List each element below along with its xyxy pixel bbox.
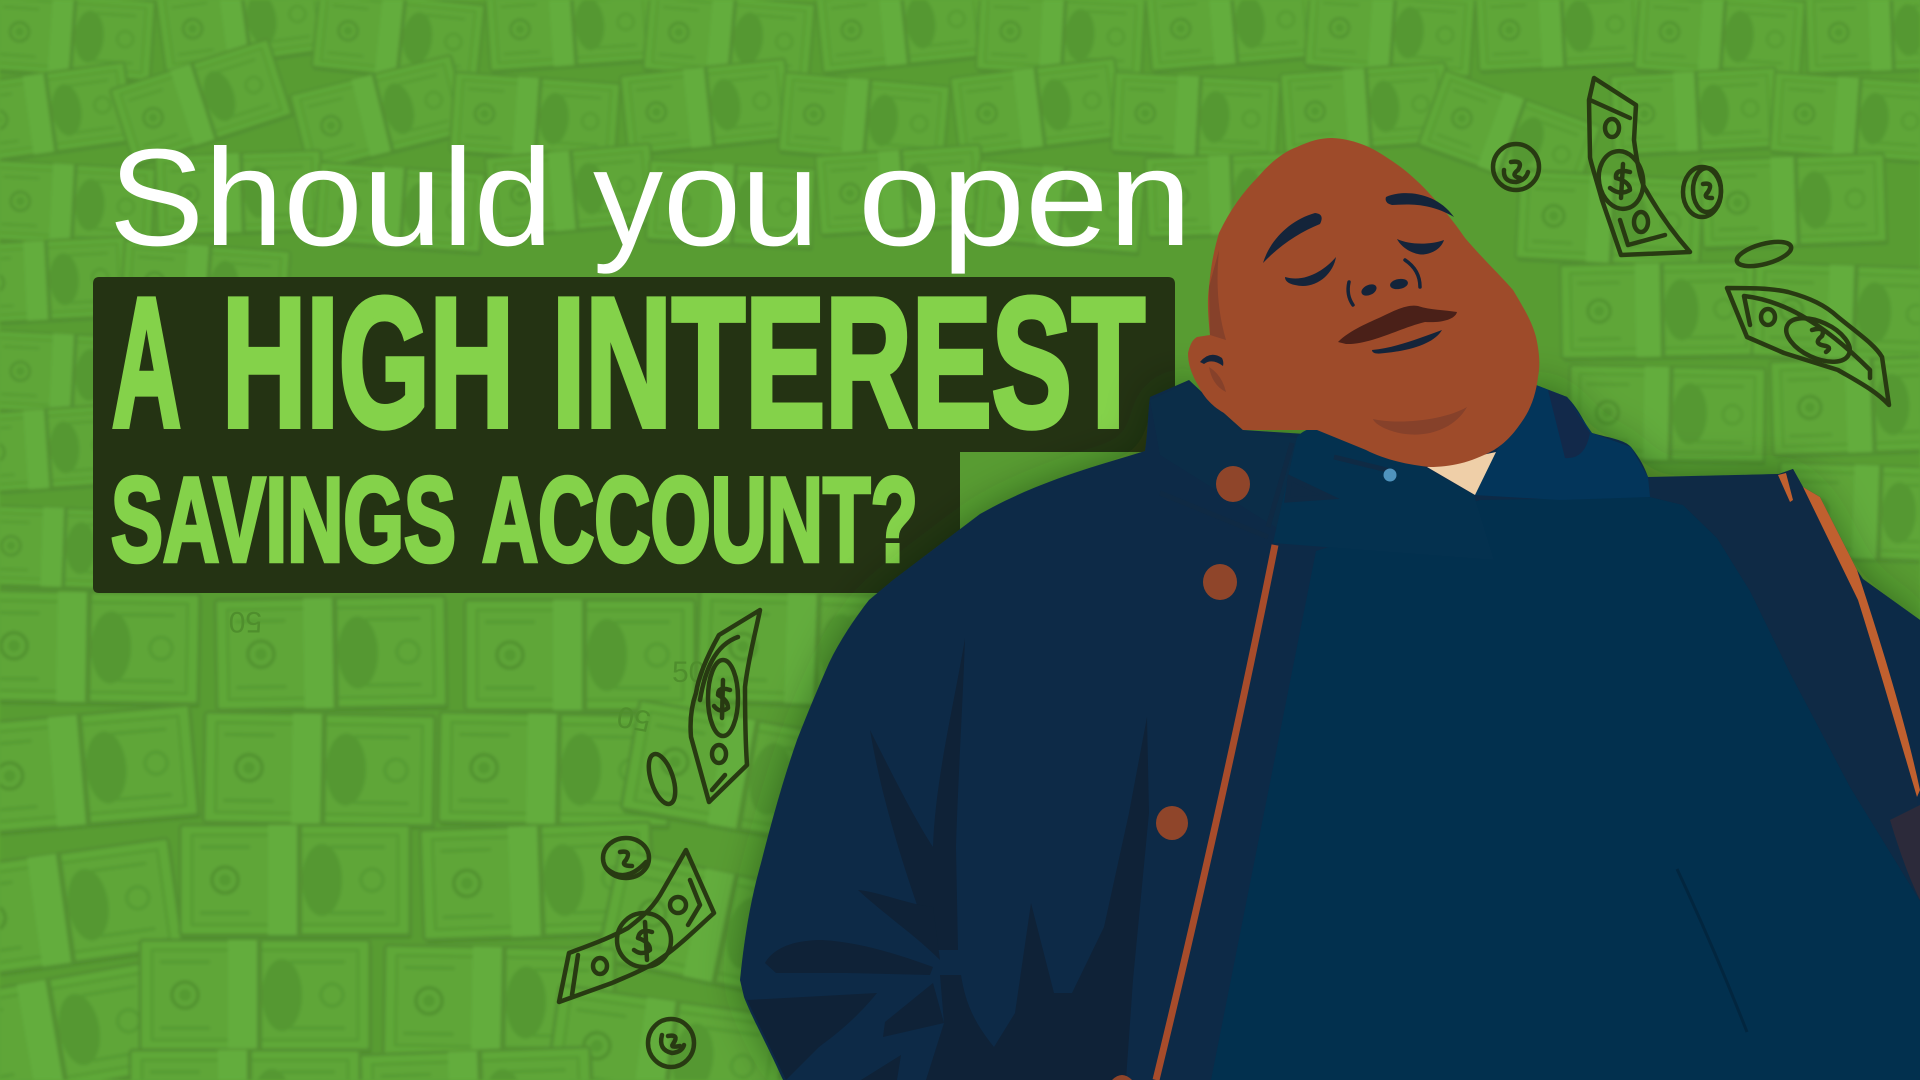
sketched banknote: right: [1727, 288, 1889, 405]
ear: [1200, 355, 1223, 366]
title line: A HIGH INTEREST: [112, 259, 1145, 465]
chin shadow: [1373, 407, 1467, 435]
sketched banknote: lower left top: [691, 610, 760, 802]
torso panel: [1211, 497, 1920, 1080]
background: stacks of banknotes in green: 50: [615, 699, 653, 738]
neck: [1427, 452, 1496, 495]
nose: [1348, 260, 1420, 305]
title line: SAVINGS ACCOUNT?: [111, 453, 918, 587]
lower lip line: [1372, 330, 1442, 354]
title line: A HIGH INTEREST: HIGH: [222, 259, 514, 465]
left orange trim: [1156, 545, 1275, 1080]
torso fold line: [1677, 869, 1747, 1032]
right eye: [1397, 239, 1444, 254]
left jacket folds: [747, 638, 1149, 1080]
collar snap: [1384, 468, 1396, 482]
sketched coin: lower left: [603, 838, 649, 878]
headline: Should you open: you: [593, 121, 819, 275]
background: stacks of banknotes in green: 50: [229, 605, 262, 638]
sketched banknote: lower left bottom: [559, 850, 714, 1002]
orange trim stub: [1778, 473, 1793, 502]
title line: A HIGH INTEREST: INTEREST: [552, 259, 1145, 465]
title line: SAVINGS ACCOUNT?: SAVINGS: [111, 453, 456, 587]
jacket buttons: [1112, 466, 1250, 1080]
right side panel: [1650, 469, 1920, 901]
head side shadow: [1209, 250, 1226, 340]
sketched coin: top: [1493, 144, 1539, 190]
right orange trim: [1803, 487, 1920, 797]
headline: Should you open: Should: [109, 121, 553, 275]
jacket body: [740, 380, 1920, 1080]
head: [1188, 138, 1539, 467]
headline: Should you open: [109, 121, 1192, 275]
collar seam: [1160, 443, 1395, 537]
title line: A HIGH INTEREST: A: [112, 259, 181, 465]
upper lip: [1338, 306, 1457, 344]
sketched coin: edge on: [1734, 237, 1794, 271]
left eyebrow: [1263, 213, 1322, 263]
left eye: [1285, 257, 1336, 286]
brown smudge at right edge: [1890, 805, 1920, 900]
right eyebrow: [1386, 193, 1454, 217]
sketched coin: lower left edge on: [644, 751, 680, 807]
background: stacks of banknotes in green: 50: [672, 656, 705, 689]
title line: SAVINGS ACCOUNT?: ACCOUNT?: [482, 453, 918, 587]
far right jacket sliver: [1860, 577, 1920, 800]
collar left: [1150, 382, 1297, 530]
sketched banknote: top right: [1589, 78, 1690, 255]
collar front: [1273, 428, 1494, 560]
collar shadow: [1548, 390, 1590, 458]
headline: Should you open: open: [858, 121, 1192, 275]
illustration: man lying on money: [740, 138, 1920, 1080]
sketched coin: right: [1683, 167, 1721, 217]
dark title panel: [93, 277, 1175, 593]
collar right: [1474, 385, 1650, 500]
sketched coin: bottom: [648, 1019, 694, 1067]
ear shadow: [1209, 367, 1226, 392]
